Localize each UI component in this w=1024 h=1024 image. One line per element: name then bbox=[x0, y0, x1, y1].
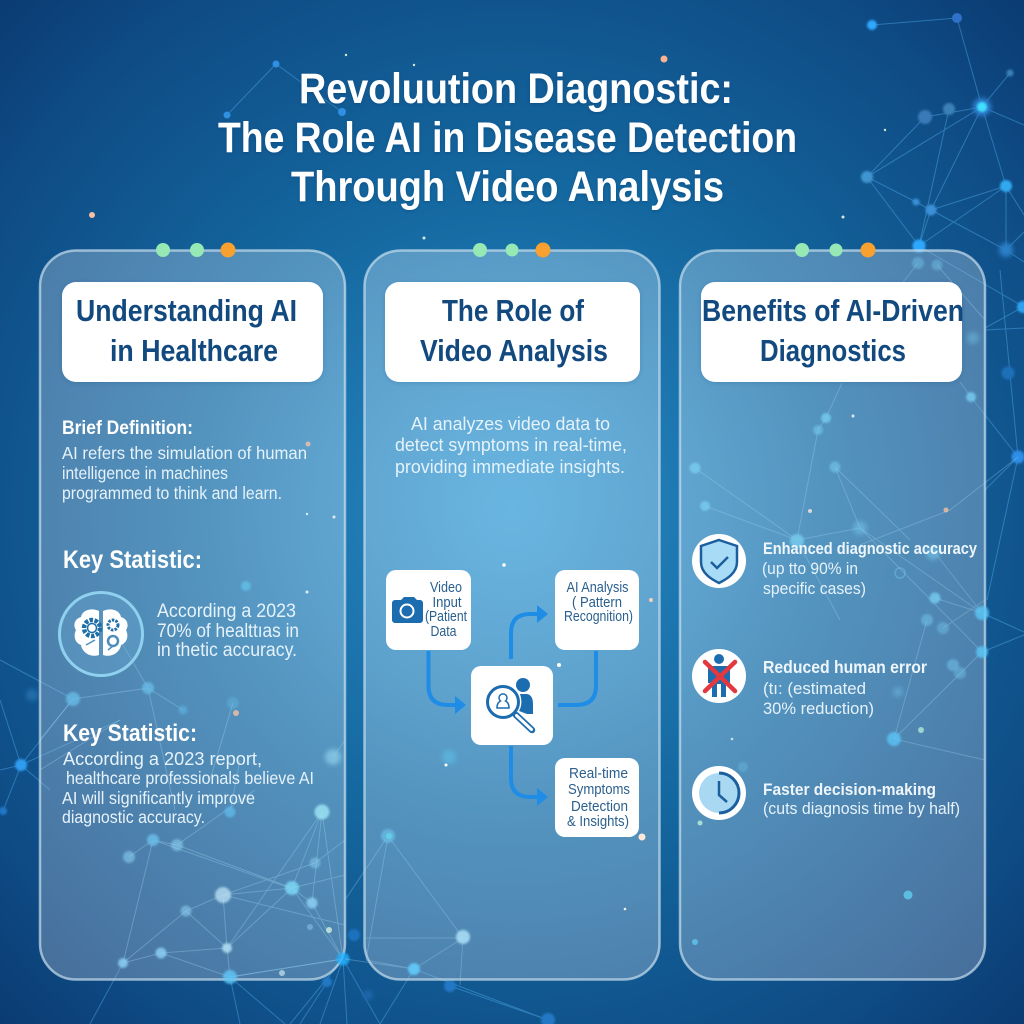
text block: statistic with icon: 70% of healttıas in bbox=[157, 621, 299, 642]
text block: description bbox=[395, 414, 627, 477]
text block: description: detect symptoms in real-time, bbox=[395, 435, 627, 455]
text block: statistic with icon bbox=[157, 601, 299, 661]
flow card: real-time detection: Real-time bbox=[569, 765, 628, 782]
benefit: reduced error: Reduced human error bbox=[763, 657, 927, 677]
benefit: reduced error: 30% reduction) bbox=[763, 699, 874, 718]
heading card: The Role of bbox=[442, 293, 585, 328]
flow card: real-time detection bbox=[555, 758, 639, 837]
benefit: reduced error: (tı: (estimated bbox=[763, 679, 866, 698]
flow card: real-time detection: Detection bbox=[571, 798, 628, 815]
icon: clock bbox=[692, 766, 746, 820]
text block: report statistic: diagnostic accuracy. bbox=[62, 807, 205, 827]
text block: report statistic: According a 2023 report, bbox=[63, 748, 262, 769]
benefit: enhanced accuracy: specific cases) bbox=[763, 579, 866, 598]
heading card bbox=[385, 282, 640, 382]
panel network bbox=[345, 563, 653, 985]
icon: brain with gears bbox=[60, 592, 142, 676]
heading card: Benefits of AI-Driven bbox=[702, 293, 964, 328]
heading card: Video Analysis bbox=[420, 333, 608, 368]
icon: camera bbox=[392, 597, 423, 623]
heading card: in Healthcare bbox=[110, 333, 278, 368]
flow card: AI analysis bbox=[555, 570, 639, 650]
benefit: enhanced accuracy: Enhanced diagnostic accuracy bbox=[763, 539, 977, 558]
panel: benefits of AI-driven diagnostics bbox=[680, 242, 1018, 980]
text block: brief definition: intelligence in machines bbox=[62, 463, 228, 483]
panel: understanding AI in healthcare bbox=[40, 242, 350, 984]
flow card: video input: (Patient bbox=[425, 608, 468, 625]
text block: statistic with icon: According a 2023 bbox=[157, 601, 296, 622]
title bbox=[218, 65, 797, 211]
status dots bbox=[156, 242, 236, 258]
flow card: real-time detection: Symptoms bbox=[568, 781, 630, 798]
text block: report statistic: healthcare professionals believe AI bbox=[66, 768, 314, 788]
heading: key statistic: Key Statistic: bbox=[63, 546, 202, 574]
status dots bbox=[795, 242, 876, 258]
heading card: Diagnostics bbox=[760, 333, 906, 368]
benefit: enhanced accuracy bbox=[762, 539, 977, 598]
text block: report statistic: AI will significantly improve bbox=[62, 788, 255, 808]
heading: key statistic second: Key Statistic: bbox=[63, 720, 197, 747]
flow card: AI analysis: AI Analysis bbox=[566, 579, 628, 596]
status dots bbox=[473, 242, 550, 258]
flow card: central analysis bbox=[471, 666, 553, 745]
flow card: video input: Video bbox=[430, 579, 462, 596]
title: Revoluution Diagnostic: bbox=[299, 65, 733, 113]
title: Through Video Analysis bbox=[291, 163, 724, 211]
flow card: AI analysis: ( Pattern bbox=[572, 594, 622, 611]
connector: AI analysis to center bbox=[558, 651, 596, 705]
text block: description: AI analyzes video data to bbox=[411, 414, 610, 434]
sparkles bbox=[89, 54, 886, 239]
flow card: video input: Input bbox=[432, 594, 462, 611]
text block: brief definition: programmed to think and learn. bbox=[62, 483, 282, 503]
benefit: enhanced accuracy: (up tto 90% in bbox=[762, 559, 858, 578]
text block: report statistic bbox=[62, 748, 314, 827]
flow card: real-time detection: & Insights) bbox=[567, 813, 629, 830]
text block: description: providing immediate insights. bbox=[395, 457, 625, 477]
benefit: faster decisions bbox=[763, 780, 960, 818]
arrow: center to AI analysis bbox=[511, 605, 548, 659]
flow card: video input bbox=[386, 570, 471, 650]
icon: shield check bbox=[692, 534, 746, 588]
flow card: AI analysis: Recognition) bbox=[564, 608, 633, 625]
text block: brief definition bbox=[62, 418, 307, 503]
benefit: reduced error bbox=[763, 657, 927, 718]
arrow: video input to center bbox=[428, 651, 466, 714]
panel network bbox=[690, 257, 1018, 945]
panel network bbox=[40, 442, 350, 984]
text block: statistic with icon: in thetic accuracy. bbox=[157, 640, 297, 661]
benefit: faster decisions: Faster decision-making bbox=[763, 780, 936, 799]
heading card bbox=[62, 282, 323, 382]
arrow: center to real-time detection bbox=[511, 746, 548, 806]
benefit: faster decisions: (cuts diagnosis time by half) bbox=[763, 799, 960, 818]
flow card: video input: Data bbox=[430, 623, 457, 640]
heading card bbox=[701, 282, 964, 382]
heading card: Understanding AI bbox=[76, 293, 297, 328]
text block: brief definition: AI refers the simulation of human bbox=[62, 443, 307, 463]
text block: brief definition: Brief Definition: bbox=[62, 418, 193, 439]
title: The Role AI in Disease Detection bbox=[218, 114, 797, 162]
panel: the role of video analysis bbox=[345, 242, 660, 985]
icon: magnifier and person bbox=[488, 678, 533, 730]
icon: crossed out person bbox=[692, 649, 746, 703]
